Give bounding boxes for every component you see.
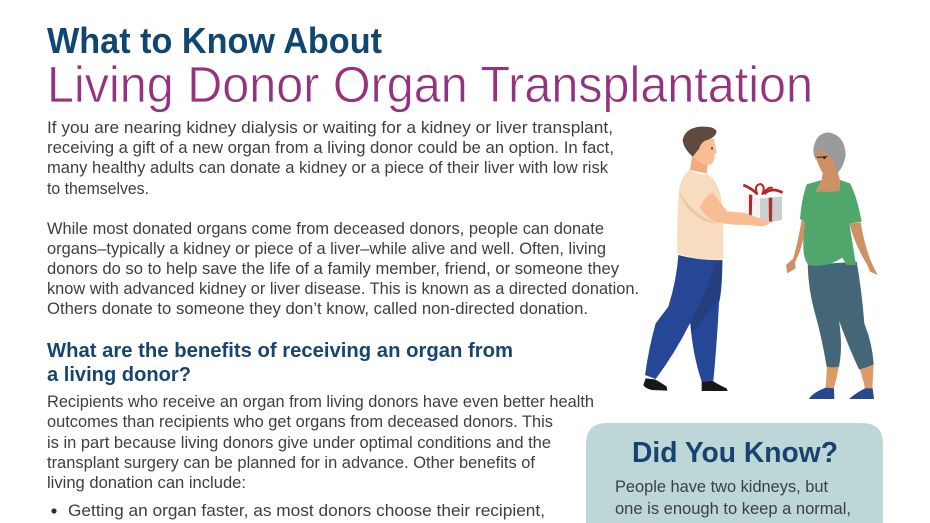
- upper body: [677, 127, 783, 260]
- text block: benefits paragraph: is in part because living donors give under optimal conditions and the: [47, 434, 551, 452]
- trousers and shoes: [643, 255, 728, 391]
- title line 2: Living Donor Organ Transplantation: [47, 56, 813, 113]
- text block: donation types paragraph: donors do so to help save the life of a family member, friend, or someone they: [47, 260, 620, 278]
- head: [693, 138, 717, 165]
- shirt: [677, 170, 723, 260]
- lower body: [808, 262, 874, 399]
- illustration: donor and recipient: [643, 127, 878, 399]
- text block: benefits paragraph: living donation can include:: [47, 474, 246, 492]
- title line 1: What to Know About: [47, 20, 382, 61]
- text block: intro paragraph: receiving a gift of a new organ from a living donor could be an option. In fact,: [47, 139, 614, 157]
- heading: benefits: a living donor?: [47, 363, 191, 386]
- figure: male donor: [643, 127, 783, 391]
- neck: [816, 168, 840, 192]
- text block: benefits paragraph: outcomes than recipients who get organs from deceased donors. This: [47, 413, 553, 431]
- text block: intro paragraph: to themselves.: [47, 180, 149, 198]
- gift box: [743, 184, 783, 222]
- upper body: [786, 132, 878, 275]
- hair: [813, 132, 846, 173]
- panel heading: Did You Know?: [632, 437, 838, 469]
- text block: donation types paragraph: Others donate to someone they don’t know, called non-directed donation.: [47, 300, 588, 318]
- text block: intro paragraph: many healthy adults can donate a kidney or a piece of their liver with low risk: [47, 159, 609, 177]
- text block: benefits paragraph: Recipients who receive an organ from living donors have even better health: [47, 393, 594, 411]
- text block: donation types paragraph: know with advanced kidney or liver disease. This is known as a directed donation.: [47, 280, 639, 298]
- hair: [683, 127, 717, 157]
- text block: donation types paragraph: While most donated organs come from deceased donors, people can donate: [47, 220, 604, 238]
- heading: benefits: [47, 339, 513, 386]
- title: [47, 20, 813, 113]
- text block: donation types paragraph: [47, 220, 639, 318]
- bullet item: Getting an organ faster, as most donors choose their recipient,: [68, 502, 545, 520]
- panel: did you know: [586, 423, 883, 523]
- face: [816, 146, 837, 174]
- panel text: [616, 480, 850, 518]
- text block: intro paragraph: [47, 119, 614, 198]
- text block: benefits paragraph: [47, 393, 594, 492]
- panel text: People have two kidneys, but: [615, 478, 829, 496]
- trousers: [808, 262, 874, 369]
- arm: [700, 193, 771, 226]
- figure: female recipient: [786, 132, 878, 399]
- calves: [826, 365, 839, 389]
- arms: [786, 220, 806, 273]
- text block: intro paragraph: If you are nearing kidney dialysis or waiting for a kidney or liver transplant,: [47, 119, 613, 137]
- neck: [690, 153, 708, 173]
- text block: donation types paragraph: organs–typically a kidney or piece of a liver–while alive and well. Often, living: [47, 240, 606, 258]
- shoes: [809, 388, 834, 399]
- shirt: [800, 180, 862, 266]
- heading: benefits: What are the benefits of receiving an organ from: [47, 339, 513, 362]
- text block: benefits paragraph: transplant surgery can be planned for in advance. Other benefits of: [47, 454, 535, 472]
- eyes: [817, 155, 827, 159]
- panel text: one is enough to keep a normal,: [615, 500, 851, 518]
